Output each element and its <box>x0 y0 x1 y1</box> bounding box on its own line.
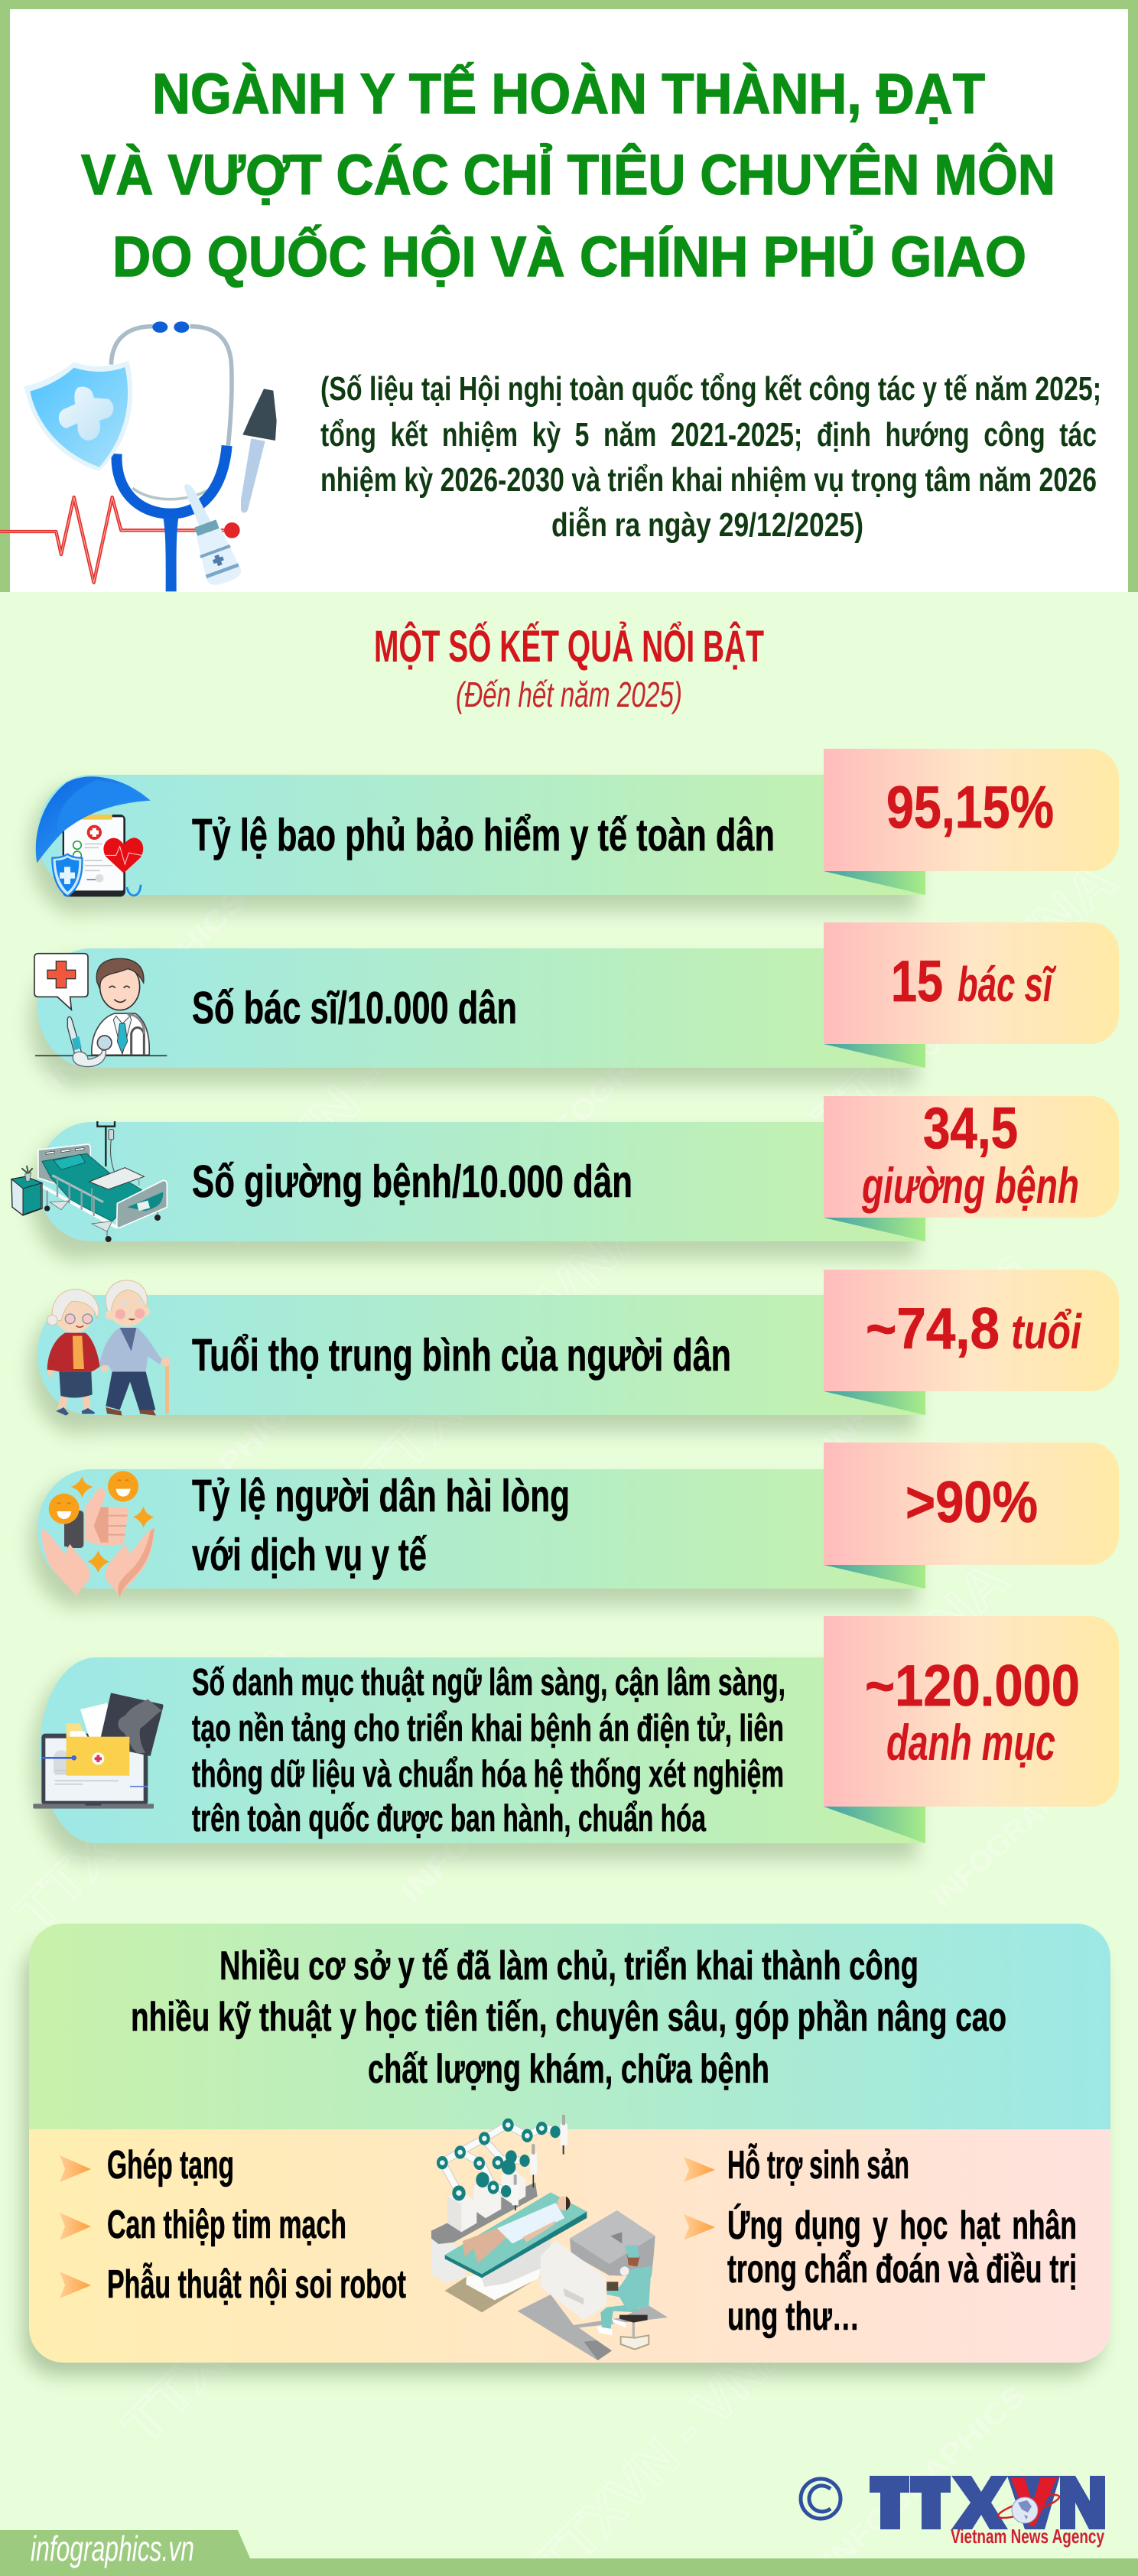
row 2 value: bác sĩ <box>958 957 1057 1012</box>
row 2 value: 15 <box>891 949 943 1014</box>
row 1 value: 95,15% <box>886 773 1054 841</box>
row 3 value: 34,5 <box>923 1096 1018 1161</box>
icon: satisfied hands <box>41 1471 154 1597</box>
row 6 label: Số danh mục thuật ngữ lâm sàng, cận lâm sàng, <box>192 1662 785 1703</box>
copyright symbol <box>801 2479 840 2519</box>
subtitle <box>320 370 1101 544</box>
panel heading: chất lượng khám, chữa bệnh <box>368 2047 769 2092</box>
row 5 value: >90% <box>906 1470 1038 1535</box>
subtitle: diễn ra ngày 29/12/2025) <box>551 506 863 544</box>
row 3 label: Số giường bệnh/10.000 dân <box>192 1156 632 1207</box>
row 2 value <box>891 949 1057 1014</box>
row 4: life expectancy <box>31 1270 1119 1434</box>
watermarks: INFOGRAPHICS <box>534 2116 735 2317</box>
watermarks <box>4 851 1127 2576</box>
title: VÀ VƯỢT CÁC CHỈ TIÊU CHUYÊN MÔN <box>81 143 1055 207</box>
watermarks: INFOGRAPHICS <box>41 884 252 1096</box>
row 4 label: Tuổi thọ trung bình của người dân <box>192 1330 731 1381</box>
row 5 label <box>192 1471 570 1580</box>
row 6: clinical terminology <box>32 1616 1119 1861</box>
watermarks: INFOGRAPHICS <box>395 1697 607 1909</box>
section heading <box>374 622 764 714</box>
icon: elderly couple <box>47 1280 171 1416</box>
watermarks: INFOGRAPHICS <box>818 2379 1032 2576</box>
icon: laptop, folder, x-ray <box>33 1693 164 1809</box>
row 3: hospital beds <box>11 1096 1119 1260</box>
row 1 label: Tỷ lệ bao phủ bảo hiểm y tế toàn dân <box>192 810 775 860</box>
watermarks: TTXVN - VNA <box>193 938 494 1262</box>
icon: hospital bed <box>11 1121 167 1242</box>
row 4 value: ~74,8 <box>866 1296 1000 1361</box>
watermarks: TTXVN - VNA <box>756 1988 1080 2288</box>
footer bar <box>0 2529 1138 2576</box>
row 5 label: với dịch vụ y tế <box>192 1530 427 1580</box>
row 2 label: Số bác sĩ/10.000 dân <box>192 983 517 1033</box>
row 6 label: trên toàn quốc được ban hành, chuẩn hóa <box>192 1798 707 1839</box>
watermarks: INFOGRAPHICS <box>526 966 727 1167</box>
watermarks: TTXVN - VNA <box>802 851 1127 1150</box>
row 6 label <box>192 1662 785 1839</box>
right bullet list <box>684 2143 1077 2339</box>
row 6 label: thông dữ liệu và chuẩn hóa hệ thống xét nghiệm <box>192 1754 784 1795</box>
left bullet list <box>60 2143 406 2307</box>
row 1: health insurance <box>31 749 1119 914</box>
watermarks: INFOGRAPHICS <box>99 1383 311 1595</box>
icon: doctor <box>34 954 167 1067</box>
right bullet list: Hỗ trợ sinh sản <box>727 2143 909 2187</box>
row 5 label: Tỷ lệ người dân hài lòng <box>192 1471 570 1521</box>
illustration: stethoscope, shield, dropper, ECG <box>0 321 277 591</box>
title <box>81 62 1055 288</box>
section heading: MỘT SỐ KẾT QUẢ NỔI BẬT <box>374 622 764 672</box>
watermarks: INFOGRAPHICS <box>47 2020 254 2226</box>
right bullet list: ung thư… <box>727 2295 860 2339</box>
row 6 value: ~120.000 <box>865 1654 1080 1719</box>
section subheading: (Đến hết năm 2025) <box>456 675 682 714</box>
row 2: doctors <box>31 922 1119 1087</box>
logo: TTXVN <box>870 2476 1105 2548</box>
left bullet list: Ghép tạng <box>107 2143 234 2187</box>
row 6 value: danh mục <box>886 1714 1055 1771</box>
header panel <box>0 0 1138 592</box>
title: DO QUỐC HỘI VÀ CHÍNH PHỦ GIAO <box>112 225 1026 288</box>
watermarks: TTXVN - VNA <box>706 1550 1019 1862</box>
row 6 value <box>865 1654 1080 1771</box>
row 4 value: tuổi <box>1011 1304 1082 1359</box>
left bullet list: Phẫu thuật nội soi robot <box>107 2262 406 2307</box>
footer site name: infographics.vn <box>31 2529 194 2568</box>
row 5: satisfaction <box>31 1442 1119 1608</box>
watermarks: TTXVN - VNA <box>111 2143 424 2456</box>
watermarks: INFOGRAPHICS <box>926 1736 1118 1914</box>
icon: umbrella and insurance clipboard <box>36 776 151 896</box>
title: NGÀNH Y TẾ HOÀN THÀNH, ĐẠT <box>152 62 985 125</box>
watermarks: INFOGRAPHICS <box>817 1248 1029 1460</box>
row 6 label: tạo nền tảng cho triển khai bệnh án điện tử, liên <box>192 1708 784 1749</box>
panel heading <box>131 1943 1006 2092</box>
row 3 value <box>861 1096 1079 1214</box>
bottom panel: advanced techniques <box>23 1924 1110 2376</box>
illustration: robotic surgery <box>431 2115 668 2360</box>
row 4 value <box>866 1296 1082 1361</box>
left bullet list: Can thiệp tim mạch <box>107 2203 346 2247</box>
watermarks: TTXVN - VNA <box>348 1195 661 1508</box>
watermarks: TTXVN - VNA <box>4 1631 317 1943</box>
